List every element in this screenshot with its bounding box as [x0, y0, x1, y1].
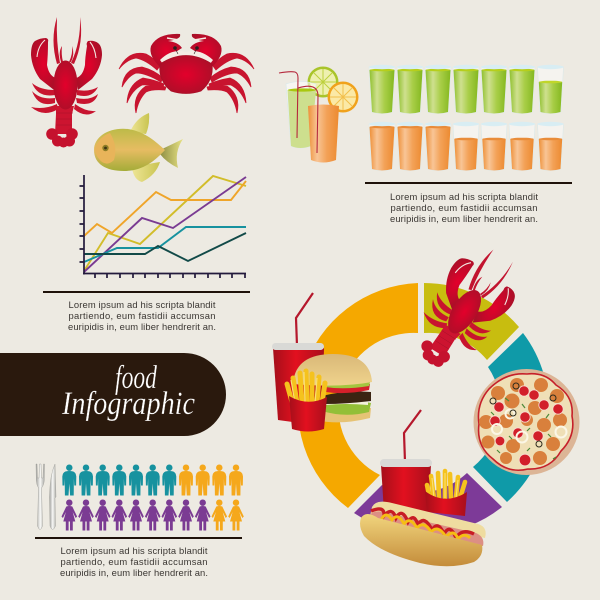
donut segment: orange [298, 283, 418, 508]
icon: orange glass [308, 104, 339, 162]
divider and caption: chart: Lorem ipsum ad his scripta blandit [68, 299, 216, 310]
icon: soda cup [272, 293, 324, 426]
icon: fork [36, 464, 44, 530]
icon: hot dog [360, 502, 486, 566]
divider and caption: people: partiendo, eum fastidii accumsan [60, 556, 208, 567]
glasses chart [369, 65, 564, 170]
icon: red lobster [31, 17, 102, 148]
divider and caption: glasses: euripidis in, eum liber hendrerit an. [390, 213, 538, 224]
donut segment: teal [473, 333, 549, 502]
chart axes [80, 175, 246, 278]
divider and caption: glasses: partiendo, eum fastidii accumsan [390, 202, 538, 213]
icon: soda cup [380, 410, 432, 516]
icon: orange slice [328, 82, 358, 112]
green glasses row [369, 65, 564, 114]
title banner [0, 353, 226, 436]
icon: red crab [119, 34, 254, 113]
pizza toppings: tomato [490, 386, 563, 466]
pizza toppings: onion rings, olives, herbs [490, 383, 566, 459]
icon: lobster over donut [402, 236, 532, 384]
divider and caption: people [35, 537, 242, 578]
chart line: purple [84, 177, 246, 272]
icon: fries [287, 371, 327, 432]
icon: soda, fries and hot dog [360, 410, 486, 566]
title text: food [115, 360, 157, 396]
people chart: men row [62, 464, 243, 496]
icon: soda, burger and fries [272, 293, 372, 432]
divider and caption: chart [43, 291, 250, 332]
icon: pizza [474, 369, 580, 475]
line chart [80, 175, 246, 278]
chart line: teal [84, 227, 246, 262]
icon: juice glasses with citrus slices [279, 66, 358, 162]
donut chart [298, 283, 549, 534]
icon: yellow fish [94, 113, 183, 182]
chart line: olive yellow [84, 176, 246, 271]
donut segment: purple [354, 473, 502, 534]
pizza toppings: pepperoni [479, 378, 567, 465]
title text [61, 360, 195, 422]
chart line: orange [84, 181, 246, 236]
divider and caption: glasses [365, 182, 572, 224]
icon: straws [279, 72, 318, 153]
icon: green glass [286, 82, 316, 148]
people chart: women row [62, 500, 244, 530]
divider and caption: people: euripidis in, eum liber hendrerit an. [60, 567, 208, 578]
orange glasses row [369, 122, 564, 170]
icon: knife [50, 464, 56, 530]
divider and caption: people: Lorem ipsum ad his scripta blandit [60, 545, 208, 556]
chart line: dark green [84, 233, 246, 261]
divider and caption: chart: euripidis in, eum liber hendrerit an. [68, 321, 216, 332]
donut segment: olive [424, 283, 519, 360]
divider and caption: glasses: Lorem ipsum ad his scripta blandit [390, 191, 538, 202]
divider and caption: chart: partiendo, eum fastidii accumsan [68, 310, 216, 321]
title text: Infographic [61, 386, 195, 422]
icon: lime slice [308, 66, 338, 98]
icon: burger [293, 354, 372, 422]
icon: fries [425, 471, 467, 516]
